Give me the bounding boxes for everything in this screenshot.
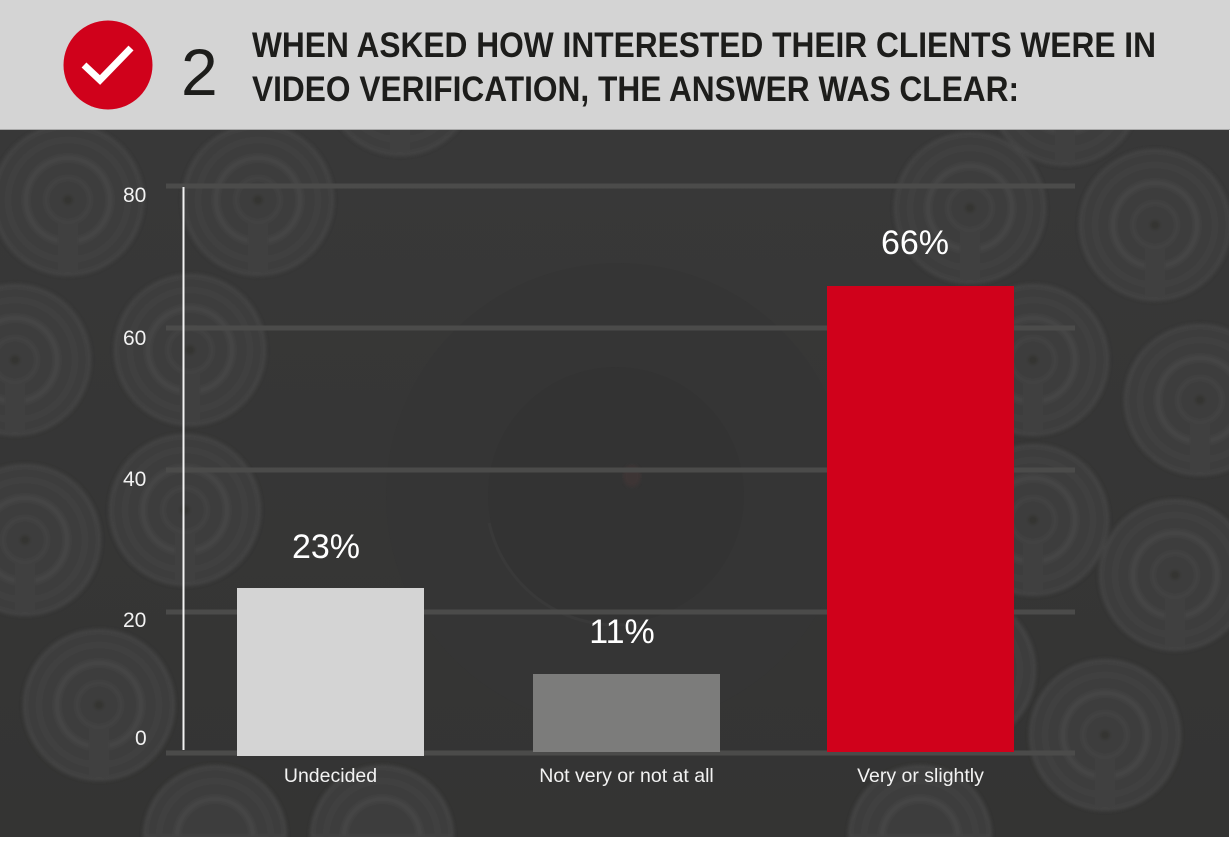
bar: Undecided 23%: Undecided [284, 765, 377, 787]
bar: Not very or not at all 11% [533, 613, 720, 787]
y axis labels: 40 [123, 468, 146, 491]
bar: Very or slightly 66%: Very or slightly [857, 765, 984, 787]
y axis labels: 0 [135, 727, 147, 750]
title: VIDEO VERIFICATION, THE ANSWER WAS CLEAR: [252, 69, 1019, 109]
bar: Undecided 23% [237, 528, 424, 787]
y axis labels: 80 [123, 184, 146, 207]
header band [0, 0, 1230, 130]
y axis labels: 60 [123, 327, 146, 350]
bar: Not very or not at all 11%: Not very or not at all [539, 765, 714, 787]
bar: Undecided 23%: 23% [292, 528, 360, 566]
step number: 2 [181, 35, 218, 109]
bar: Very or slightly 66% [827, 224, 1014, 787]
grid lines [166, 186, 1075, 753]
bar chart [123, 184, 1075, 787]
icon: red check badge [64, 20, 152, 110]
y axis labels [123, 184, 147, 750]
bar: Very or slightly 66%: 66% [881, 224, 949, 262]
bar: Not very or not at all 11%: 11% [589, 613, 655, 651]
y axis line [182, 187, 184, 750]
y axis labels: 20 [123, 609, 146, 632]
